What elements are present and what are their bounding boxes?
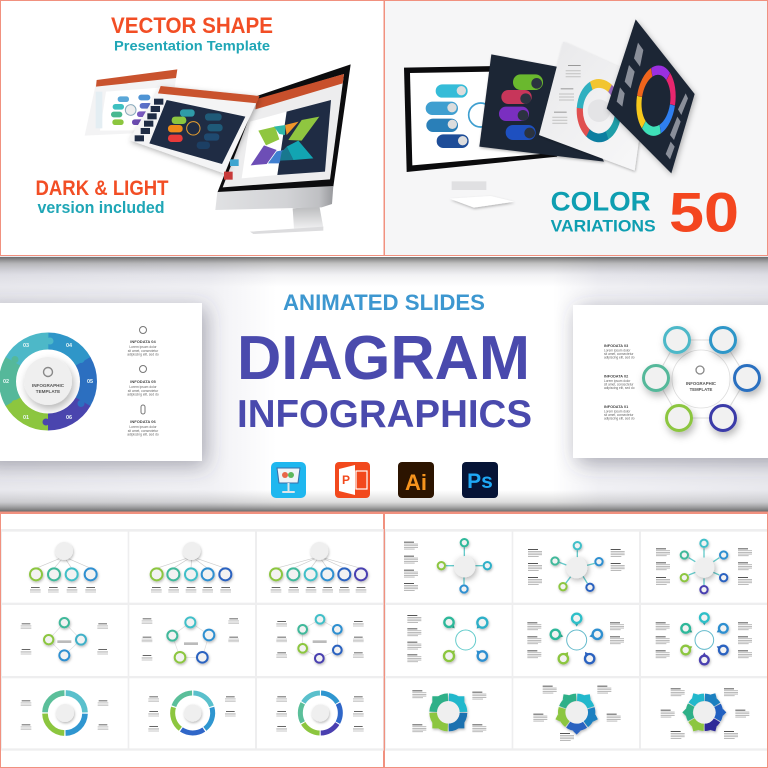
dark diamond slide with colorful ring xyxy=(607,19,695,173)
ring segment numbers: 03 xyxy=(23,343,29,349)
thumbnail: five node cycle xyxy=(129,605,255,676)
ring segment numbers: 05 xyxy=(87,379,93,385)
infodata 05 xyxy=(127,366,159,396)
thumbnail: four arrow ring xyxy=(386,678,512,748)
panel: slide thumbnails right xyxy=(384,514,768,768)
slide window: light version xyxy=(85,69,177,136)
thumbnail: five segment ring xyxy=(129,678,255,748)
heading: vector shape: VECTOR SHAPE xyxy=(111,13,273,38)
panel: circle nodes slide card xyxy=(573,305,768,458)
panel: 50 color variations xyxy=(384,0,768,256)
heading: color: COLOR xyxy=(551,187,651,217)
light slide with segmented ring xyxy=(539,42,647,171)
panel: slide thumbnails left xyxy=(0,514,384,768)
infodata 01: INFODATA 01 xyxy=(604,405,628,409)
panel: central title band xyxy=(0,256,768,513)
infodata 04: Lorem ipsum dolor xyxy=(129,345,158,349)
thumbnail: tree with five nodes xyxy=(129,532,255,603)
icon: keynote xyxy=(271,462,306,498)
illustration: desktop monitor with slide windows xyxy=(85,64,351,234)
infodata 02 xyxy=(604,374,635,390)
title: infographics: INFOGRAPHICS xyxy=(237,393,532,436)
thumbnail: ring with four pins xyxy=(386,605,512,676)
center label: INFOGRAPHIC xyxy=(686,381,716,386)
subheading: presentation template: Presentation Template xyxy=(114,38,270,54)
infodata 03: adipiscing elit, sed do xyxy=(604,356,635,360)
infodata 03: Lorem ipsum dolor xyxy=(604,348,631,352)
infodata 06: INFODATA 06 xyxy=(130,419,157,424)
connector outline xyxy=(656,340,747,418)
infodata 06: Lorem ipsum dolor xyxy=(129,425,158,429)
infodata 06: sit amet, consectetur xyxy=(128,429,159,433)
center label xyxy=(686,366,716,392)
icon: illustrator: Ai xyxy=(405,470,427,495)
thumbnail: tree with four nodes xyxy=(2,532,128,603)
infodata 05: adipiscing elit, sed do xyxy=(127,392,159,396)
thumbnail: six segment ring xyxy=(257,678,383,748)
thumbnail: ring with six pins xyxy=(641,605,767,676)
infodata 04 xyxy=(127,326,159,356)
thumbnail: tree with six nodes xyxy=(257,532,383,603)
center circle: INFOGRAPHIC xyxy=(32,383,65,388)
infodata 04: sit amet, consectetur xyxy=(128,349,159,353)
infodata 06: adipiscing elit, sed do xyxy=(127,432,159,436)
thumbnail: five arrow ring xyxy=(513,678,639,748)
monitor chin xyxy=(215,186,333,210)
thumbnail grid background xyxy=(1,529,384,751)
ring segment numbers: 06 xyxy=(66,415,72,421)
slide window: dark version xyxy=(129,86,259,180)
infodata 05: sit amet, consectetur xyxy=(128,389,159,393)
heading: dark and light: DARK & LIGHT xyxy=(36,177,169,200)
subheading: version included: version included xyxy=(38,198,164,217)
infodata 01: adipiscing elit, sed do xyxy=(604,416,635,420)
heading: variations: VARIATIONS xyxy=(551,218,656,236)
monitor stand and base xyxy=(450,181,514,208)
monitor screen xyxy=(404,66,557,172)
center circle: TEMPLATE xyxy=(36,389,60,394)
x shaped diagram on screen xyxy=(251,117,319,165)
thumbnail: six node cycle xyxy=(257,605,383,676)
infodata 06 xyxy=(127,405,159,436)
infodata 04: adipiscing elit, sed do xyxy=(127,352,159,356)
thumbnail grid background xyxy=(385,529,767,751)
thumbnail: four segment ring xyxy=(2,678,128,748)
icon: photoshop: Ps xyxy=(467,470,493,493)
thumbnail: six arrow ring xyxy=(641,678,767,748)
monitor stand xyxy=(250,206,323,234)
infodata 02: sit amet, consectetur xyxy=(604,382,634,386)
center label: TEMPLATE xyxy=(690,387,713,392)
infodata 02: adipiscing elit, sed do xyxy=(604,386,635,390)
icon: powerpoint: P xyxy=(342,473,350,487)
title: diagram: DIAGRAM xyxy=(237,323,530,393)
nodes xyxy=(644,328,760,430)
heading: animated slides: ANIMATED SLIDES xyxy=(283,290,485,315)
center inner outline xyxy=(672,350,730,408)
monitor screen app xyxy=(223,74,344,187)
thumbnail: four node cycle xyxy=(2,605,128,676)
ring segment numbers: 04 xyxy=(66,343,73,349)
thumbnail: hub with five satellites xyxy=(513,532,639,603)
number: 50: 50 xyxy=(669,182,739,244)
thumbnail: ring with five pins xyxy=(513,605,639,676)
ring segment numbers: 02 xyxy=(3,379,9,385)
ring segment numbers xyxy=(3,343,93,421)
puzzle ring chart xyxy=(0,326,103,437)
infodata 04: INFODATA 04 xyxy=(130,339,157,344)
icon: powerpoint xyxy=(335,462,370,498)
infodata 03: INFODATA 03 xyxy=(604,344,628,348)
infodata 05: Lorem ipsum dolor xyxy=(129,385,158,389)
infodata 02: Lorem ipsum dolor xyxy=(604,379,631,383)
infodata 01: Lorem ipsum dolor xyxy=(604,410,631,414)
panel: vector shape template xyxy=(0,0,384,256)
center circle xyxy=(24,357,72,405)
monitor bezel xyxy=(217,64,351,193)
infodata 02: INFODATA 02 xyxy=(604,374,628,378)
panel: puzzle ring slide card xyxy=(0,303,202,461)
light slide list pills xyxy=(426,84,493,148)
icon: photoshop xyxy=(462,462,498,498)
thumbnail: hub with six satellites xyxy=(641,532,767,603)
icon: illustrator xyxy=(398,462,434,498)
infodata 03 xyxy=(604,344,635,360)
infodata 05: INFODATA 05 xyxy=(130,379,157,384)
ring segment numbers: 01 xyxy=(23,415,29,421)
thumbnail: hub with four satellites xyxy=(386,532,512,603)
infodata 03: sit amet, consectetur xyxy=(604,352,634,356)
infodata 01 xyxy=(604,405,635,420)
dark slide with pills xyxy=(479,54,604,162)
infodata 01: sit amet, consectetur xyxy=(604,413,634,417)
